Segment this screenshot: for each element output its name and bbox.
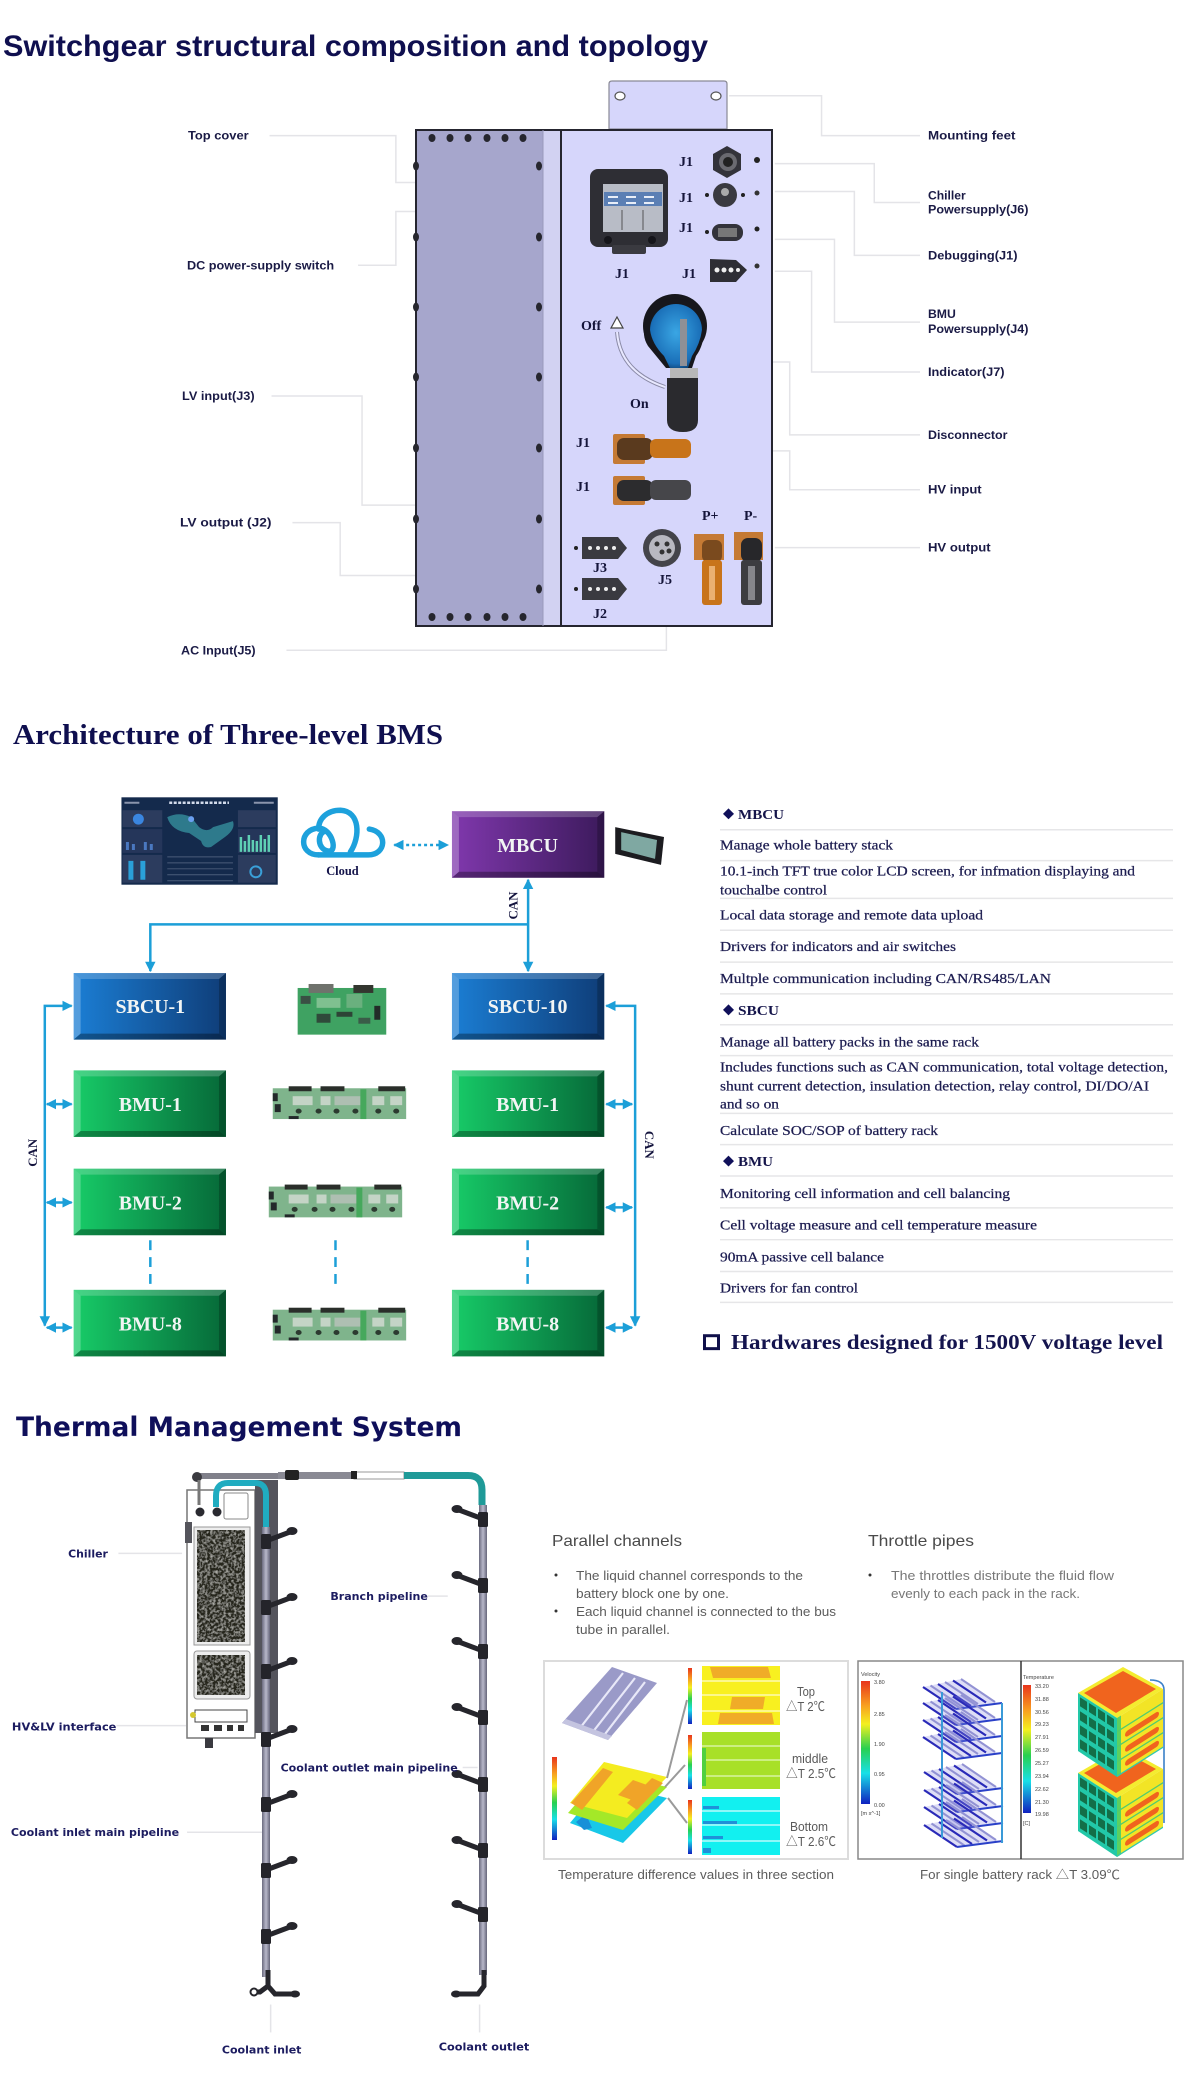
connector designators: J1 bbox=[576, 436, 590, 451]
MBCU items bbox=[720, 839, 1135, 987]
box: BMU-1 left bbox=[74, 1070, 226, 1137]
mounting foot bbox=[609, 81, 727, 129]
temperature scale: 19.98 bbox=[1035, 1812, 1049, 1818]
cover screws bbox=[413, 134, 542, 621]
text block: parallel channels bbox=[552, 1533, 836, 1637]
temperature scale: 29.23 bbox=[1035, 1722, 1049, 1728]
MBCU list bbox=[720, 808, 1135, 987]
velocity scale: 0.00 bbox=[874, 1803, 885, 1809]
velocity scale: 0.95 bbox=[874, 1772, 885, 1778]
labels right: Mounting feet bbox=[928, 129, 1016, 143]
section annotations: △T 2.6℃ bbox=[786, 1834, 836, 1849]
connector designators: J1 bbox=[682, 267, 696, 282]
labels right: HV input bbox=[928, 483, 982, 497]
box: MBCU bbox=[452, 811, 604, 878]
CAN bus right bbox=[606, 1006, 635, 1328]
icon: LCD touch screen bbox=[615, 827, 664, 865]
title: switchgear: Switchgear structural composition and topology bbox=[3, 30, 708, 63]
connector designators: J2 bbox=[593, 607, 607, 622]
panel: switchgear diagram bbox=[180, 81, 1028, 657]
SBCU items: Manage all battery packs in the same rack bbox=[720, 1036, 979, 1051]
battery rack heat map bbox=[1078, 1667, 1164, 1857]
temperature scale: 22.62 bbox=[1035, 1787, 1049, 1793]
connector designators: J1 bbox=[576, 480, 590, 495]
connector designators: On bbox=[630, 397, 649, 412]
CAN bus left bbox=[45, 1006, 72, 1328]
temperature scale: [C] bbox=[1023, 1821, 1030, 1827]
temperature scale bbox=[1023, 1675, 1054, 1827]
panel: rack flow and temperature chart bbox=[858, 1661, 1183, 1859]
icon: monitoring dashboard bbox=[121, 797, 278, 885]
piping labels: HV&LV interface bbox=[12, 1722, 116, 1734]
temperature scale: 26.59 bbox=[1035, 1748, 1049, 1754]
labels right: HV output bbox=[928, 541, 991, 555]
connector designators: J3 bbox=[593, 561, 607, 576]
arrow: cloud to MBCU bbox=[394, 844, 448, 846]
MBCU items: Drivers for indicators and air switches bbox=[720, 940, 956, 955]
labels left: DC power-supply switch bbox=[187, 258, 334, 272]
piping labels: Chiller bbox=[68, 1548, 109, 1560]
box: SBCU-10: SBCU-10 bbox=[488, 996, 567, 1018]
panel: coolant piping diagram bbox=[11, 1470, 529, 2056]
LV and AC connectors bbox=[574, 529, 681, 600]
temperature scale: 25.27 bbox=[1035, 1761, 1049, 1767]
title: thermal management: Thermal Management System bbox=[16, 1412, 462, 1443]
heading: BMU: BMU bbox=[738, 1155, 773, 1170]
heading: SBCU bbox=[723, 1004, 779, 1019]
velocity scale bbox=[861, 1672, 885, 1817]
SBCU items: Includes functions such as CAN communication, total voltage detection, bbox=[720, 1061, 1168, 1076]
DC power-supply switch bbox=[590, 169, 668, 254]
icon: SBCU circuit board bbox=[298, 984, 386, 1035]
section annotations bbox=[786, 1684, 836, 1849]
HV input connectors bbox=[613, 434, 691, 505]
text block: throttle pipes bbox=[868, 1533, 1115, 1601]
piping labels bbox=[11, 1548, 529, 2056]
dividers bbox=[720, 830, 1173, 1302]
rotation arrow off/on bbox=[611, 317, 665, 387]
box: SBCU-1 bbox=[74, 973, 226, 1040]
connector designators: J1 bbox=[679, 221, 693, 236]
box: BMU-8 right bbox=[452, 1290, 604, 1356]
BMU list bbox=[720, 1155, 1037, 1296]
text block: parallel channels: tube in parallel. bbox=[576, 1623, 670, 1637]
icon: cold plate bbox=[562, 1667, 657, 1740]
icon: cloud bbox=[304, 810, 383, 878]
box: BMU-2 right bbox=[452, 1169, 604, 1235]
section: bottom bbox=[688, 1797, 780, 1855]
labels right: BMU bbox=[928, 307, 956, 321]
color scale bbox=[552, 1757, 557, 1840]
temperature scale: 30.56 bbox=[1035, 1710, 1049, 1716]
SBCU items: Calculate SOC/SOP of battery rack bbox=[720, 1124, 938, 1139]
labels left: LV input(J3) bbox=[182, 389, 255, 403]
box: BMU-2 left bbox=[74, 1169, 226, 1235]
connector lines bbox=[665, 1700, 687, 1823]
piping labels: Coolant inlet bbox=[222, 2044, 301, 2056]
piping labels: Coolant outlet bbox=[439, 2041, 529, 2053]
temperature scale: 33.20 bbox=[1035, 1684, 1049, 1690]
icon: cloud: Cloud bbox=[326, 864, 359, 878]
box: SBCU-1: SBCU-1 bbox=[115, 996, 185, 1018]
box: BMU-8 left: BMU-8 bbox=[119, 1314, 182, 1336]
throttle pipe network bbox=[923, 1679, 1003, 1847]
section: top bbox=[688, 1666, 780, 1725]
labels right: Powersupply(J6) bbox=[928, 202, 1028, 216]
section annotations: Bottom bbox=[790, 1819, 828, 1834]
text block: parallel channels: Each liquid channel is connected to the bus bbox=[576, 1605, 836, 1619]
caption: rack temperature: For single battery rack △T 3.09℃ bbox=[920, 1868, 1120, 1882]
box: SBCU-10 bbox=[452, 973, 604, 1040]
section annotations: △T 2.5℃ bbox=[786, 1766, 836, 1781]
heading: MBCU: MBCU bbox=[738, 808, 784, 823]
temperature scale: 31.88 bbox=[1035, 1697, 1049, 1703]
MBCU items: Manage whole battery stack bbox=[720, 839, 893, 854]
labels right: Disconnector bbox=[928, 428, 1008, 442]
label: CAN right: CAN bbox=[642, 1131, 657, 1160]
MBCU items: Local data storage and remote data upload bbox=[720, 908, 983, 923]
box: BMU-1 right bbox=[452, 1070, 604, 1137]
temperature scale: 21.30 bbox=[1035, 1800, 1049, 1806]
heading: BMU bbox=[723, 1155, 773, 1170]
box: BMU-2 left: BMU-2 bbox=[119, 1192, 182, 1214]
BMU items: 90mA passive cell balance bbox=[720, 1251, 884, 1266]
BMU items: Cell voltage measure and cell temperature measure bbox=[720, 1219, 1037, 1234]
title: BMS architecture: Architecture of Three-level BMS bbox=[13, 719, 443, 751]
labels right: Chiller bbox=[928, 188, 966, 202]
callout: 1500V hardware: Hardwares designed for 1500V voltage level bbox=[731, 1330, 1163, 1354]
connector designators: Off bbox=[581, 319, 602, 334]
icon: BMU circuit boards bbox=[269, 1086, 406, 1340]
MBCU items: 10.1-inch TFT true color LCD screen, for infmation displaying and bbox=[720, 865, 1135, 880]
labels right bbox=[928, 129, 1028, 555]
velocity scale: 2.85 bbox=[874, 1712, 885, 1718]
piping labels: Branch pipeline bbox=[330, 1591, 428, 1603]
labels left bbox=[180, 129, 334, 657]
chiller unit bbox=[185, 1472, 278, 1748]
temperature scale: 27.91 bbox=[1035, 1735, 1049, 1741]
text block: throttle pipes: evenly to each pack in the rack. bbox=[891, 1587, 1080, 1601]
HV output connectors bbox=[694, 532, 763, 605]
caption: temperature sections: Temperature difference values in three section bbox=[558, 1868, 834, 1882]
piping labels: Coolant outlet main pipeline bbox=[281, 1762, 458, 1774]
labels right: Debugging(J1) bbox=[928, 248, 1017, 262]
MBCU items: Multple communication including CAN/RS485/LAN bbox=[720, 972, 1051, 987]
section annotations: middle bbox=[792, 1751, 828, 1766]
connector designators: P+ bbox=[702, 509, 719, 524]
signal connectors J6 J1 J7 J4 bbox=[705, 146, 760, 282]
box: BMU-2 right: BMU-2 bbox=[496, 1192, 559, 1214]
labels left: AC Input(J5) bbox=[181, 643, 256, 657]
box: BMU-8 left bbox=[74, 1290, 226, 1356]
velocity scale: 3.80 bbox=[874, 1680, 885, 1686]
text block: parallel channels: battery block one by one. bbox=[576, 1587, 729, 1601]
connector designators: J1 bbox=[615, 267, 629, 282]
text block: parallel channels: Parallel channels bbox=[552, 1533, 682, 1550]
text block: throttle pipes: The throttles distribute the fluid flow bbox=[891, 1569, 1115, 1583]
BMU items bbox=[720, 1187, 1037, 1296]
continuation dashes bbox=[150, 1240, 528, 1290]
CAN bus: MBCU to SBCUs bbox=[150, 880, 528, 971]
BMU items: Drivers for fan control bbox=[720, 1281, 858, 1296]
box: BMU-1 right: BMU-1 bbox=[496, 1094, 559, 1116]
SBCU list bbox=[720, 1004, 1168, 1139]
piping labels: Coolant inlet main pipeline bbox=[11, 1827, 179, 1839]
velocity scale: Velocity bbox=[861, 1672, 880, 1678]
box: BMU-8 right: BMU-8 bbox=[496, 1314, 559, 1336]
MBCU items: touchalbe control bbox=[720, 883, 827, 898]
connector designators bbox=[576, 155, 758, 622]
panel: BMS topology diagram bbox=[25, 797, 664, 1356]
panel: BMS feature list bbox=[704, 808, 1173, 1354]
labels left: LV output (J2) bbox=[180, 516, 272, 530]
text block: throttle pipes: Throttle pipes bbox=[868, 1533, 974, 1550]
coolant outlet main pipeline bbox=[451, 1505, 488, 1998]
panel: temperature sections chart bbox=[544, 1661, 848, 1859]
connector designators: J1 bbox=[679, 191, 693, 206]
connector designators: J5 bbox=[658, 573, 672, 588]
label: CAN top: CAN bbox=[506, 891, 521, 920]
cabinet body bbox=[416, 130, 772, 626]
top pipeline bbox=[278, 1470, 482, 1505]
coolant inlet main pipeline bbox=[250, 1527, 300, 1998]
temperature scale: 23.94 bbox=[1035, 1774, 1049, 1780]
velocity scale: [m s^-1] bbox=[861, 1811, 881, 1817]
leader lines bbox=[116, 1553, 480, 2032]
SBCU items: shunt current detection, insulation detection, relay control, DI/DO/AI bbox=[720, 1079, 1149, 1094]
temperature scale: Temperature bbox=[1023, 1675, 1054, 1681]
box: BMU-1 left: BMU-1 bbox=[119, 1094, 182, 1116]
SBCU items bbox=[720, 1036, 1168, 1139]
connector designators: J1 bbox=[679, 155, 693, 170]
heading: SBCU: SBCU bbox=[738, 1004, 779, 1019]
labels right: Powersupply(J4) bbox=[928, 322, 1028, 336]
section: middle bbox=[688, 1732, 780, 1789]
leader lines bbox=[270, 96, 920, 650]
labels left: Top cover bbox=[188, 129, 249, 143]
label: CAN left: CAN bbox=[25, 1138, 40, 1167]
section annotations: Top bbox=[797, 1684, 815, 1699]
stacked plate heat map bbox=[568, 1762, 667, 1843]
velocity scale: 1.90 bbox=[874, 1742, 885, 1748]
SBCU items: and so on bbox=[720, 1097, 779, 1112]
labels right: Indicator(J7) bbox=[928, 365, 1005, 379]
box: MBCU: MBCU bbox=[497, 835, 558, 857]
section annotations: △T 2℃ bbox=[786, 1699, 825, 1714]
connector designators: P- bbox=[744, 509, 758, 524]
text block: parallel channels: The liquid channel corresponds to the bbox=[576, 1569, 803, 1583]
BMU items: Monitoring cell information and cell balancing bbox=[720, 1187, 1010, 1202]
disconnector knob bbox=[643, 294, 707, 432]
